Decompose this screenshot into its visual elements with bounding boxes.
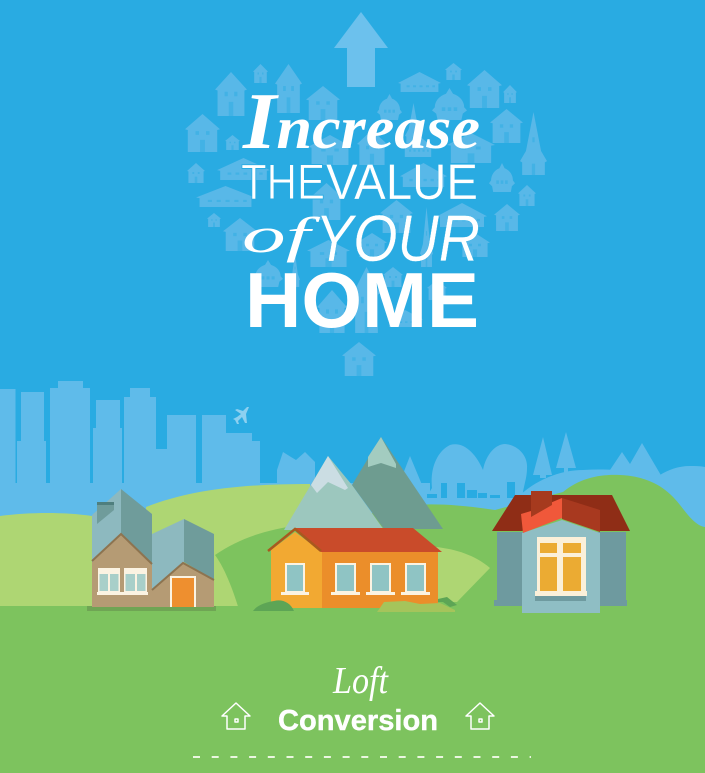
title line: THE: THE — [241, 154, 325, 210]
wall — [92, 535, 214, 607]
distant mountains — [610, 443, 662, 477]
mid green hill — [215, 475, 705, 620]
roof — [492, 495, 630, 531]
roof edge — [92, 534, 214, 590]
light green wedge — [436, 547, 490, 602]
dashed divider — [193, 756, 531, 758]
house: teal right with red roof — [492, 491, 630, 613]
door — [170, 576, 196, 607]
windows — [281, 563, 430, 595]
gaps under tree crowns — [427, 482, 515, 498]
heading script: Loft: Loft — [332, 660, 389, 702]
ground — [0, 606, 705, 773]
title — [241, 78, 480, 344]
roof lit right — [562, 498, 600, 532]
title line: VALUE: VALUE — [326, 154, 478, 210]
bushes — [253, 600, 294, 611]
mountain: dark right — [352, 437, 443, 529]
windows — [97, 568, 148, 595]
section heading — [222, 660, 494, 737]
heading: Conversion: Conversion — [278, 705, 438, 737]
roof — [295, 528, 442, 552]
mountain snow cap — [311, 456, 348, 493]
dormer — [97, 502, 114, 524]
tall roof — [92, 489, 121, 562]
title line: YOUR: YOUR — [315, 201, 480, 275]
wall — [322, 552, 438, 608]
house: orange middle — [253, 528, 457, 612]
icon: up arrow — [334, 12, 388, 87]
mountain: teal left — [284, 456, 384, 530]
mountains — [284, 437, 443, 530]
distant trees and hills — [396, 432, 705, 535]
front wall — [522, 520, 600, 613]
icon: house left — [222, 703, 250, 729]
low roof — [152, 519, 184, 590]
title line: Increase: Increase — [242, 78, 480, 166]
hills — [0, 475, 705, 773]
house silhouettes cluster — [185, 63, 547, 376]
side walls — [497, 532, 626, 600]
round trees — [426, 444, 527, 498]
city skyline — [0, 381, 430, 530]
ground shadow — [87, 606, 216, 611]
title line: of: of — [242, 207, 321, 263]
roof lit left — [521, 498, 562, 533]
mountain snow cap right — [368, 437, 396, 468]
window — [535, 537, 587, 601]
house: brown left — [87, 489, 216, 611]
light blue hill band — [425, 466, 705, 535]
gable — [271, 532, 322, 608]
chimney — [531, 491, 552, 517]
pine trees — [533, 437, 552, 478]
icon: house right — [466, 703, 494, 729]
small peak — [396, 456, 425, 492]
gable edge — [268, 529, 321, 551]
light green hills — [0, 484, 310, 610]
title line: HOME: HOME — [245, 256, 479, 344]
icon: airplane — [233, 407, 249, 424]
